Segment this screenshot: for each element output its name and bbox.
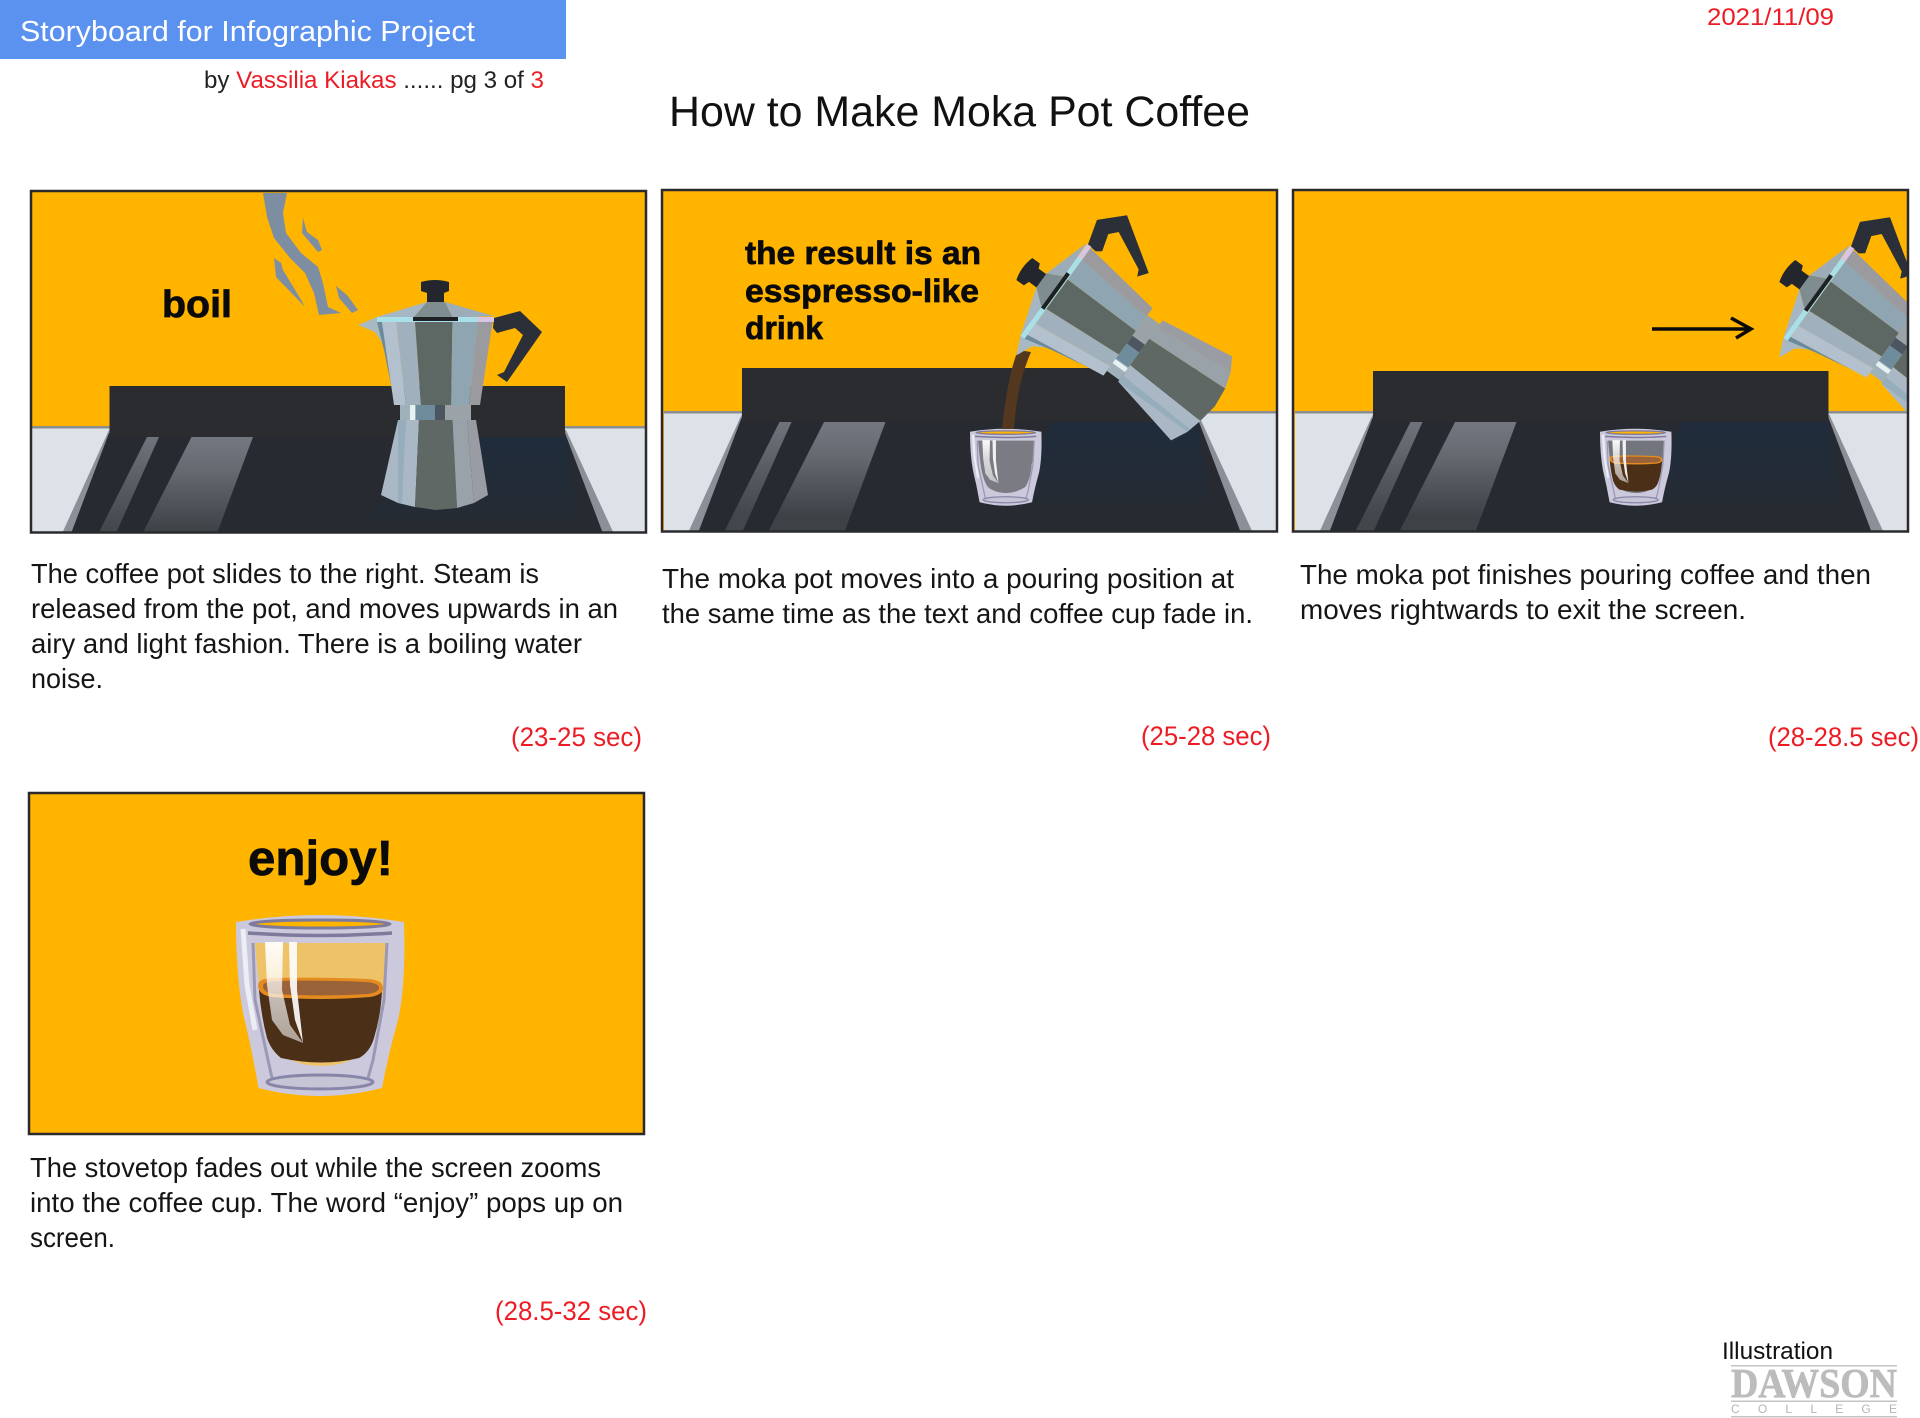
timing: 28.5-32 sec: (28.5-32 sec) (495, 1296, 647, 1326)
header banner: Storyboard for Infographic Project (20, 16, 475, 48)
panel: enjoy description (30, 1152, 623, 1253)
panel: boil description: The coffee pot slides to the right. Steam is (31, 558, 539, 589)
panel: enjoy description: The stovetop fades out while the screen zooms (30, 1152, 601, 1183)
panel: enjoy frame (29, 793, 644, 1134)
title: How to Make Moka Pot Coffee (669, 88, 1250, 136)
byline: by Vassilia Kiakas ...... pg 3 of 3 (204, 67, 544, 94)
panel: boil frame (30, 190, 648, 534)
panel: boil description: released from the pot, and moves upwards in an (31, 593, 618, 624)
logo: Dawson College: DAWSON (1731, 1360, 1897, 1406)
illustration: stove, empty glass and pouring pot (664, 215, 1276, 530)
on-screen text: the result: the result is an (745, 235, 981, 271)
on-screen text: the result (745, 235, 981, 346)
panel: boil description: airy and light fashion. There is a boiling water (31, 628, 582, 659)
on-screen word: enjoy: enjoy! (248, 832, 393, 886)
on-screen text: the result: esspresso-like (745, 273, 979, 309)
label: Illustration: Illustration (1722, 1338, 1833, 1365)
panel: pouring frame (660, 188, 1278, 533)
timing: 25-28 sec: (25-28 sec) (1141, 721, 1271, 751)
panel: exit frame (1292, 188, 1910, 533)
panel: pouring description: the same time as the text and coffee cup fade in. (662, 598, 1253, 629)
timing: 23-25 sec: (23-25 sec) (511, 722, 642, 752)
icon: coffee glass (236, 915, 404, 1096)
panel: enjoy description: into the coffee cup. The word “enjoy” pops up on (30, 1187, 623, 1218)
on-screen text: the result: drink (745, 310, 823, 346)
panel: exit description: The moka pot finishes pouring coffee and then (1300, 559, 1871, 590)
illustration: stove, filled glass and exiting pot (1164, 186, 1920, 552)
date: 2021/11/09 (1707, 4, 1834, 31)
on-screen word: boil: boil (162, 284, 232, 326)
arrow: exit right (1652, 318, 1751, 338)
illustration: stove and pot with steam (32, 193, 645, 532)
panel: enjoy description: screen. (30, 1222, 115, 1253)
panel: pouring description (662, 563, 1253, 629)
panel: boil description (31, 558, 618, 694)
panel: exit description (1300, 559, 1871, 625)
panel: boil description: noise. (31, 663, 103, 694)
logo: Dawson College: COLLEGE (1731, 1402, 1897, 1416)
header banner (0, 0, 566, 59)
panel: exit description: moves rightwards to exit the screen. (1300, 594, 1746, 625)
panel: pouring description: The moka pot moves into a pouring position at (662, 563, 1234, 594)
